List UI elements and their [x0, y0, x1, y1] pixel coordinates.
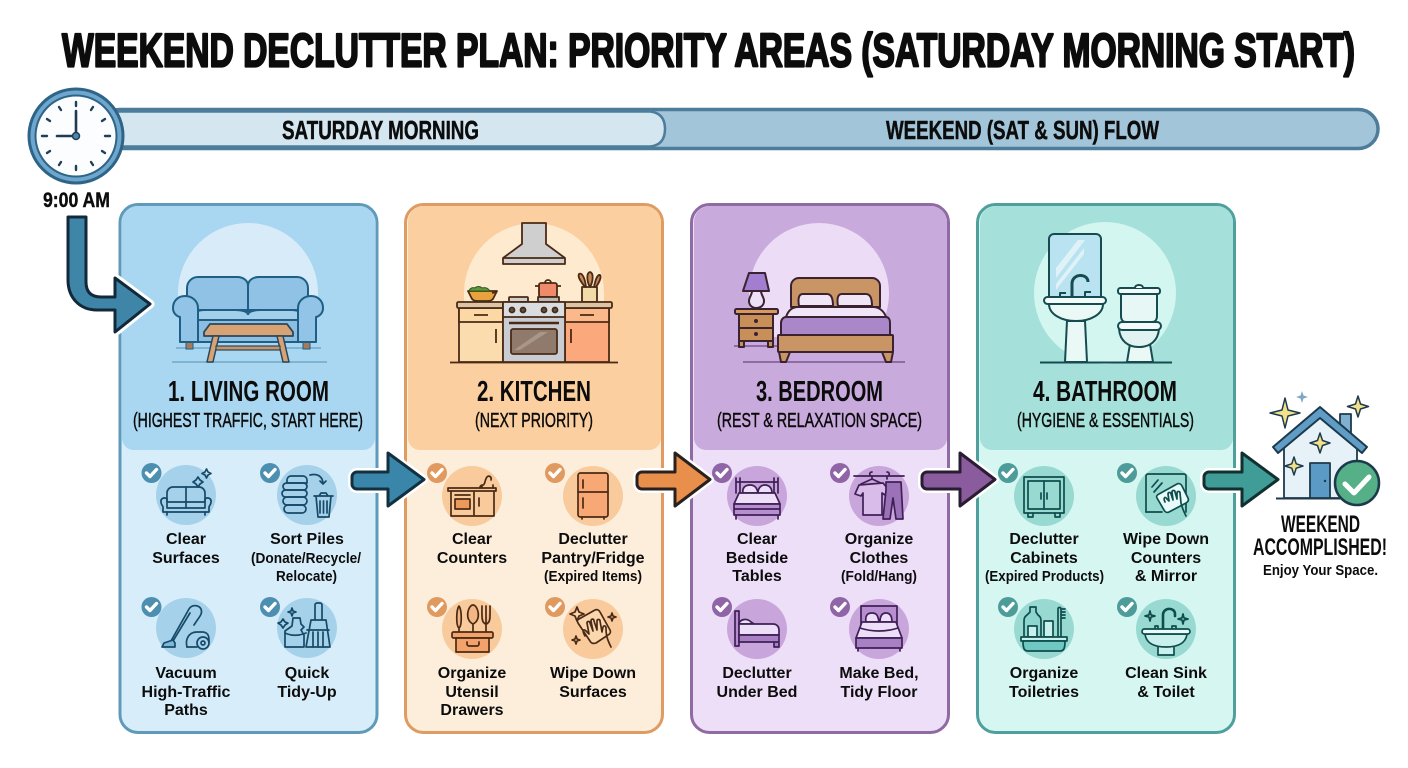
icon: clock — [29, 89, 123, 183]
arrow: bedroom to bathroom — [922, 453, 995, 506]
heading: bathroom: 4. BATHROOM — [1033, 376, 1177, 408]
panel: living room — [120, 204, 377, 732]
task: wipe counters and mirror: & Mirror — [1135, 568, 1197, 585]
task: clean sink and toilet: & Toilet — [1137, 684, 1195, 701]
task: organize clothes: Organize — [845, 531, 913, 548]
task: organize clothes — [830, 463, 917, 585]
task: clean sink and toilet — [1117, 597, 1207, 701]
task: wipe counters and mirror: Counters — [1131, 550, 1201, 567]
task: clear surfaces: Surfaces — [152, 550, 220, 567]
task: declutter cabinets: Declutter — [1009, 531, 1079, 548]
task: clear bedside tables: Bedside — [726, 550, 788, 567]
heading: kitchen: 2. KITCHEN — [477, 376, 591, 408]
task: vacuum paths: Paths — [164, 702, 208, 719]
timeline label: weekend flow: WEEKEND (SAT & SUN) FLOW — [886, 115, 1159, 145]
task: wipe down surfaces: Surfaces — [559, 684, 627, 701]
task: declutter under bed — [712, 597, 797, 701]
task: declutter pantry: Declutter — [558, 531, 628, 548]
task: clear surfaces — [142, 463, 220, 567]
task: organize toiletries: Toiletries — [1009, 684, 1079, 701]
task: declutter under bed: Declutter — [722, 665, 792, 682]
task: declutter pantry: (Expired Items) — [544, 568, 642, 585]
subheading: bedroom: (REST & RELAXATION SPACE) — [717, 410, 922, 432]
task: wipe counters and mirror — [1117, 463, 1209, 585]
task: clear counters — [427, 463, 507, 567]
task: quick tidy-up — [260, 597, 337, 701]
illustration: sink and toilet — [1034, 222, 1176, 364]
subheading: living room: (HIGHEST TRAFFIC, START HERE) — [133, 410, 363, 432]
task: clear counters: Clear — [452, 531, 492, 548]
task: make bed — [830, 597, 919, 701]
task: organize utensil drawers: Drawers — [440, 702, 504, 719]
panel: kitchen — [406, 204, 662, 732]
heading: living room: 1. LIVING ROOM — [168, 376, 329, 408]
subheading: bathroom: (HYGIENE & ESSENTIALS) — [1017, 410, 1194, 432]
task: organize clothes: Clothes — [850, 550, 908, 567]
task: sort piles: Relocate) — [276, 568, 337, 585]
task: declutter pantry: Pantry/Fridge — [541, 550, 645, 567]
illustration: sofa and table — [172, 223, 327, 362]
subheading: kitchen: (NEXT PRIORITY) — [475, 410, 593, 432]
finish message: WEEKEND — [1281, 511, 1360, 538]
task: organize utensil drawers: Organize — [438, 665, 506, 682]
finish message — [1253, 511, 1387, 579]
task: quick tidy-up: Quick — [285, 665, 329, 682]
task: wipe down surfaces: Wipe Down — [550, 665, 636, 682]
task: organize utensil drawers: Utensil — [445, 684, 499, 701]
arrow: kitchen to bedroom — [637, 453, 710, 506]
task: organize utensil drawers — [427, 597, 506, 719]
task: organize toiletries — [998, 597, 1079, 701]
task: organize toiletries: Organize — [1010, 665, 1078, 682]
task: clean sink and toilet: Clean Sink — [1125, 665, 1207, 682]
task: sort piles — [251, 463, 362, 585]
task: wipe down surfaces — [545, 597, 636, 701]
timeline bar — [100, 110, 1378, 148]
task: declutter cabinets: (Expired Products) — [985, 568, 1104, 585]
illustration: bed and nightstand — [734, 223, 905, 362]
heading: bedroom: 3. BEDROOM — [756, 376, 883, 408]
task: quick tidy-up: Tidy-Up — [277, 684, 337, 701]
task: clear bedside tables: Tables — [732, 568, 782, 585]
panel: bathroom — [978, 204, 1234, 732]
task: clear bedside tables — [712, 463, 788, 585]
illustration: kitchen stove and counter — [450, 223, 618, 362]
arrow: bathroom to finish — [1204, 453, 1278, 506]
task: sort piles: Sort Piles — [270, 531, 344, 548]
task: clear bedside tables: Clear — [737, 531, 777, 548]
task: vacuum paths — [142, 597, 231, 719]
task: clear counters: Counters — [437, 550, 507, 567]
arrow: living room to kitchen — [352, 453, 424, 506]
arrow: clock to living room — [68, 217, 150, 332]
task: make bed: Tidy Floor — [840, 684, 918, 701]
task: organize clothes: (Fold/Hang) — [841, 568, 917, 585]
task: clear surfaces: Clear — [166, 531, 206, 548]
task: declutter pantry — [541, 463, 645, 585]
panel: bedroom — [692, 204, 948, 732]
task: declutter cabinets — [985, 463, 1104, 585]
task: sort piles: (Donate/Recycle/ — [251, 550, 362, 567]
task: declutter under bed: Under Bed — [717, 684, 797, 701]
task: vacuum paths: High-Traffic — [142, 684, 231, 701]
task: make bed: Make Bed, — [839, 665, 919, 682]
finish message: Enjoy Your Space. — [1263, 562, 1378, 579]
task: wipe counters and mirror: Wipe Down — [1123, 531, 1209, 548]
clock time label: 9:00 AM — [43, 189, 110, 212]
icon: sparkling clean house — [1270, 391, 1379, 505]
task: declutter cabinets: Cabinets — [1010, 550, 1078, 567]
timeline label: saturday morning: SATURDAY MORNING — [282, 115, 479, 145]
task: vacuum paths: Vacuum — [155, 665, 217, 682]
